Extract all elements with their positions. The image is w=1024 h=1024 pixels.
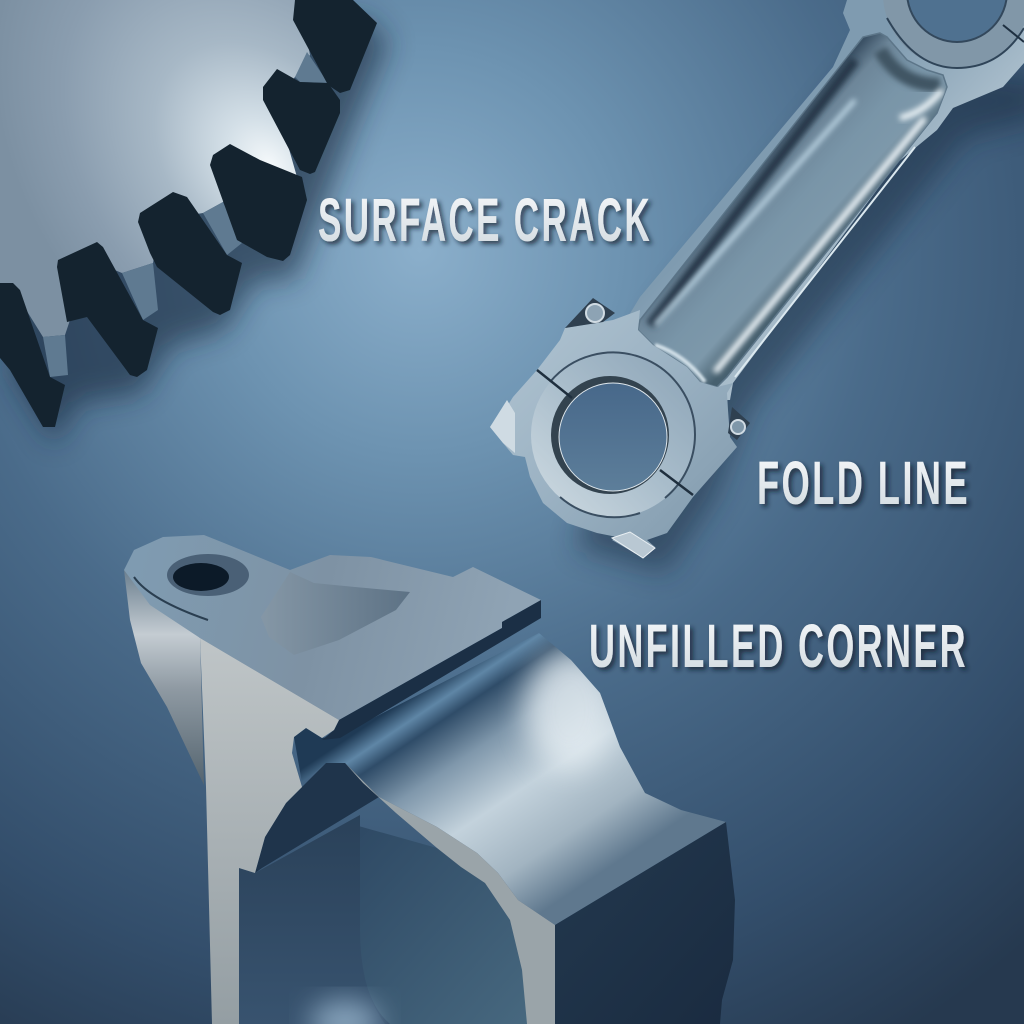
bracket cut section bbox=[200, 638, 339, 1024]
forged bracket bbox=[124, 535, 735, 1024]
rod small end ring bbox=[883, 0, 1024, 68]
rod ring edge arcs bbox=[550, 352, 695, 517]
bracket top face bbox=[124, 535, 541, 720]
gear face bbox=[0, 0, 310, 337]
rod split lines bbox=[537, 370, 693, 495]
bracket left inner panel bbox=[239, 815, 385, 1024]
rod left lug bbox=[490, 400, 515, 453]
rod bore bbox=[551, 376, 669, 494]
rod big end body bbox=[490, 310, 737, 558]
rod bottom lug bbox=[612, 532, 655, 558]
bracket dark end block bbox=[555, 822, 735, 1024]
bracket lower edge strip bbox=[345, 763, 555, 1024]
bracket bolt hole bbox=[167, 554, 249, 596]
rod rim highlight bbox=[735, 147, 915, 377]
bracket shallow recess bbox=[261, 572, 410, 655]
bracket underside bbox=[255, 763, 379, 873]
gear side walls bbox=[43, 52, 328, 377]
rod recessed channel bbox=[638, 33, 947, 387]
bracket groove shadow bbox=[322, 600, 541, 740]
label: surface crack: SURFACE CRACK bbox=[318, 186, 652, 254]
bracket side highlight bbox=[525, 650, 615, 770]
rod bolt right bbox=[728, 407, 750, 440]
bracket inner opening bbox=[355, 825, 530, 1024]
rod bolt top bbox=[565, 298, 615, 328]
bracket lug lip line bbox=[134, 577, 208, 620]
rod big end ring bbox=[531, 353, 695, 517]
gear bbox=[0, 0, 389, 445]
connecting rod bbox=[490, 0, 1024, 573]
rod shaft and small end body bbox=[620, 0, 1024, 400]
gear teeth bbox=[0, 0, 377, 427]
bracket left wall bbox=[124, 570, 204, 785]
bracket light reflection bbox=[310, 1000, 380, 1024]
bracket curved side bbox=[294, 633, 726, 925]
rod channel highlights bbox=[650, 50, 942, 382]
